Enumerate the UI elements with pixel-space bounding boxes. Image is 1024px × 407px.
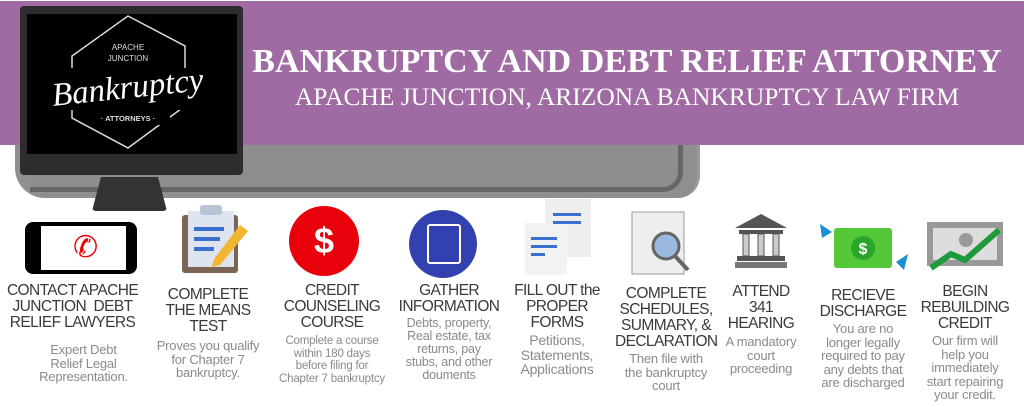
step 9: immediately: [931, 360, 999, 375]
step 8: required to pay: [821, 348, 905, 363]
step 6: court: [652, 378, 680, 393]
step 2: Proves you qualify: [157, 338, 259, 353]
step 3: CREDIT: [305, 282, 359, 299]
step 3: COURSE: [301, 314, 363, 331]
step 7: court: [747, 348, 775, 362]
title: BANKRUPTCY AND DEBT RELIEF ATTORNEY: [252, 43, 1002, 80]
step 6: SUMMARY, &: [621, 317, 711, 334]
step 3: Complete a course: [285, 335, 379, 347]
monitor with logo: [20, 6, 243, 175]
step 6: SCHEDULES,: [619, 301, 713, 318]
step 2: THE MEANS: [165, 302, 251, 319]
step 2: for Chapter 7: [171, 352, 245, 366]
icon: credit rebuild: [927, 222, 1003, 270]
step 1: RELIEF LAWYERS: [10, 314, 135, 331]
step 5: Petitions,: [529, 332, 585, 348]
step 4: INFORMATION: [399, 298, 499, 315]
step 5: FILL OUT the: [514, 282, 600, 299]
icon: courthouse: [735, 214, 787, 268]
step 4: Debts, property,: [407, 316, 491, 330]
step 1: Expert Debt: [50, 342, 117, 357]
step 9: REBUILDING: [921, 299, 1009, 316]
step 4: douments: [422, 368, 476, 382]
step 2: [157, 286, 260, 380]
step 5: FORMS: [531, 314, 583, 331]
step 4: [399, 282, 499, 382]
step 3: within 180 days: [294, 348, 370, 360]
step 4: Real estate, tax: [407, 329, 491, 343]
screen: [27, 14, 237, 154]
step 7: ATTEND: [732, 283, 790, 300]
step 1: Relief Legal: [50, 356, 117, 370]
step 7: 341: [749, 299, 773, 316]
step 3: before filing for: [296, 360, 368, 372]
icon: clipboard: [182, 205, 248, 273]
step 5: Statements,: [521, 346, 593, 362]
icon: money discharge: $: [859, 241, 868, 258]
step 8: RECIEVE: [831, 287, 895, 304]
step 6: COMPLETE: [626, 285, 706, 302]
logo: APACHE: [112, 43, 144, 52]
logo: Bankruptcy: [50, 62, 206, 114]
header banner: [0, 1, 1024, 145]
icon: phone: [25, 222, 137, 274]
step 9: CREDIT: [938, 315, 992, 332]
logo: [50, 15, 206, 149]
step 3: Chapter 7 bankruptcy: [279, 372, 385, 384]
step 2: COMPLETE: [168, 286, 248, 303]
logo: JUNCTION: [108, 54, 148, 63]
step 6: Then file with: [629, 351, 703, 366]
step 8: [820, 287, 906, 390]
step 5: [514, 282, 600, 377]
step 9: start repairing: [927, 374, 1003, 388]
icon: notebook: [409, 210, 477, 278]
icon: forms: [525, 199, 591, 275]
step 8: any debts that: [824, 362, 902, 376]
step 7: HEARING: [728, 315, 794, 332]
step 3: COUNSELING: [284, 298, 380, 315]
step 8: longer legally: [826, 334, 900, 350]
step 4: stubs, and other: [406, 355, 492, 369]
step 2: bankruptcy.: [176, 365, 240, 380]
step 8: DISCHARGE: [820, 303, 906, 320]
step 9: Our firm will: [932, 333, 998, 348]
step 1: Representation.: [39, 369, 128, 384]
icon: phone: ✆: [73, 231, 98, 264]
step 5: PROPER: [526, 298, 588, 315]
icon: money discharge: [820, 224, 908, 270]
icon: credit counseling: $: [314, 220, 334, 261]
icon: credit counseling: [289, 206, 359, 276]
monitor stand: [92, 177, 167, 211]
step 3: [279, 282, 385, 384]
step 7: proceeding: [730, 361, 792, 376]
step 2: TEST: [189, 318, 227, 335]
step 1: JUNCTION DEBT: [13, 298, 132, 315]
step 6: DECLARATION: [615, 333, 718, 350]
logo: · ATTORNEYS ·: [101, 114, 155, 123]
step 5: Applications: [520, 361, 594, 377]
step 9: [921, 283, 1009, 402]
step 4: GATHER: [419, 282, 479, 299]
step 8: are discharged: [821, 375, 905, 390]
step 1: [7, 282, 138, 384]
step 9: BEGIN: [942, 283, 988, 300]
step 6: the bankruptcy: [625, 364, 707, 380]
gray monitor base bar: [15, 145, 700, 198]
step 7: [726, 283, 796, 376]
step 9: help you: [941, 346, 989, 362]
step 1: CONTACT APACHE: [7, 282, 138, 299]
step 6: [615, 285, 718, 393]
icon: document magnifier: [632, 212, 690, 274]
step 9: your credit.: [934, 387, 996, 402]
subtitle: APACHE JUNCTION, ARIZONA BANKRUPTCY LAW FIRM: [295, 82, 959, 111]
step 7: A mandatory: [726, 334, 796, 349]
step 4: returns, pay: [417, 342, 481, 356]
step 8: You are no: [833, 321, 893, 336]
